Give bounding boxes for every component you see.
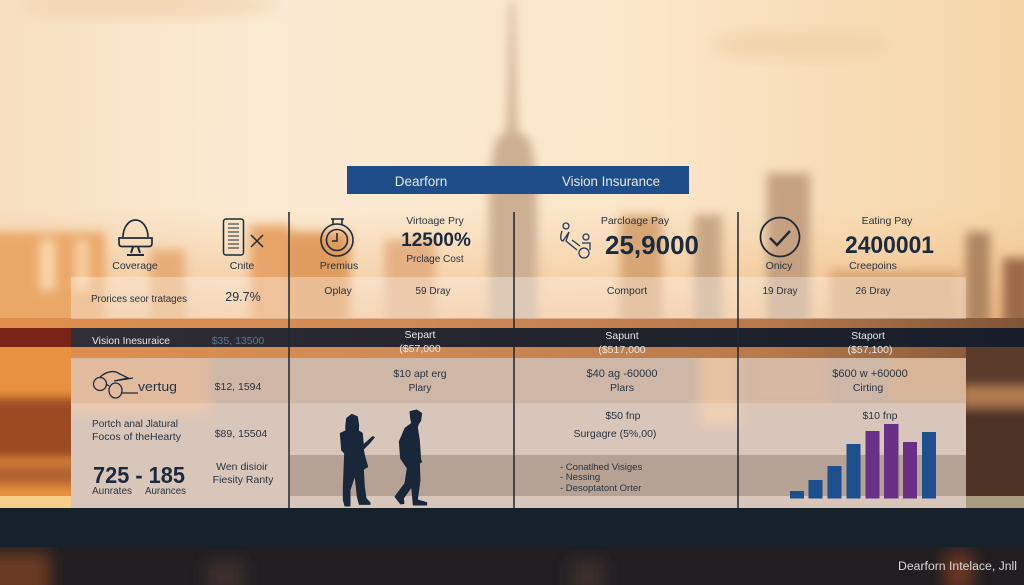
icon: stopwatch: [321, 219, 353, 256]
stat: 2400001: 2400001: [845, 232, 934, 259]
row 1 text: 59 Dray: [415, 286, 451, 297]
stat: 12500%: Prclage Cost: [406, 254, 464, 265]
panel: comparison table rows: [71, 277, 966, 508]
row 1 text: Prorices seor tratages: [91, 294, 187, 305]
right side blur strip: [966, 347, 1024, 496]
stat: 2400001: Eating Pay: [862, 215, 913, 227]
row 4 text: Focos of theHearty: [92, 432, 181, 443]
icon: glasses and car logo: [94, 372, 138, 398]
row 4 text: $50 fnp: [605, 410, 641, 422]
stat: 25,9000: [561, 215, 699, 260]
row 2 text: dark band: Sapunt: [605, 330, 639, 342]
row 1 text: Oplay: [324, 285, 352, 297]
row 5 text: - Nessing: [560, 472, 600, 483]
stat: 2400001: Creepoins: [849, 260, 897, 272]
icon: people with wheelchair: [561, 223, 590, 258]
row 2 text: dark band: $35, 13500: [212, 335, 264, 347]
column: premium header: Premius: [320, 260, 358, 272]
row 2 text: dark band: [92, 329, 892, 356]
row 3 text: $40 ag -60000: [587, 368, 657, 380]
silhouettes: two people walking and talking: [340, 410, 427, 506]
row 3 text: $12, 1594: [215, 381, 262, 393]
icon: coverage dome: [119, 220, 152, 255]
row 5 text: Wen disioir: [216, 461, 268, 473]
column: coverage header: Coverage: [112, 260, 158, 272]
row 5 text: Aunrates: [92, 486, 132, 497]
row 4 text: [92, 410, 898, 443]
dark band row: [0, 328, 1024, 347]
row 1 text: 19 Dray: [762, 286, 798, 297]
row 2 text: dark band: Separt: [405, 329, 436, 341]
column: premium header: [320, 219, 358, 272]
row 3 text: $600 w +60000: [832, 368, 908, 380]
row 4 text: Portch anal Jlatural: [92, 419, 178, 430]
title banner: [347, 166, 689, 194]
row 2 text: dark band: Staport: [851, 330, 885, 342]
row 3 text: Plars: [610, 382, 634, 394]
row 5 text: - Desoptatont Orter: [560, 483, 641, 494]
row 5 text: Fiesity Ranty: [213, 474, 274, 486]
row 5 text: - Conatlhed Visiges: [560, 462, 642, 473]
title banner: Dearforn: [395, 174, 447, 189]
stat: 2400001: Onicy: [766, 260, 793, 272]
stat: 25,9000: 25,9000: [605, 230, 699, 260]
footer credit: Dearforn Intelace, Jnll: [898, 561, 1017, 573]
stat: 25,9000: Parcloage Pay: [601, 215, 670, 227]
row 4 text: $10 fnp: [862, 410, 898, 422]
left side blur strip: [0, 347, 71, 496]
row 1 text: [91, 285, 891, 305]
row 3 text: Cirting: [853, 382, 883, 394]
stat: 12500%: [401, 215, 471, 265]
row 2 text: dark band: ($517,000: [598, 344, 646, 356]
row 1 text: 26 Dray: [855, 286, 891, 297]
bar chart: [790, 424, 936, 498]
row 5 text: 725 - 185: [93, 462, 185, 488]
title banner: Vision Insurance: [562, 174, 660, 189]
bottom dark bar: [0, 508, 1024, 547]
stat: 2400001: [760, 215, 934, 272]
column: crite header: Cnite: [230, 260, 254, 272]
icon: check circle: [760, 218, 800, 256]
row 2 text: dark band: ($57,100): [848, 344, 892, 356]
icon: document with cross: [224, 219, 263, 255]
row 2 text: dark band: ($57,000: [399, 343, 441, 355]
row 4 text: $89, 15504: [215, 428, 267, 440]
table backdrop: [60, 347, 980, 508]
row 1 text: 29.7%: [225, 290, 261, 304]
row 5 text: Aurances: [145, 486, 186, 497]
column dividers: [289, 212, 738, 508]
stat: 12500%: Virtoage Pry: [406, 215, 465, 227]
row 3 text: [94, 368, 908, 398]
row 5 text: [92, 461, 642, 497]
row 3 text: Plary: [409, 383, 431, 394]
row 4 text: Surgagre (5%,00): [574, 428, 656, 440]
column: coverage header: [112, 220, 158, 272]
column: crite header: [224, 219, 263, 272]
row 2 text: dark band: Vision Inesuraice: [92, 335, 170, 347]
stat: 12500%: 12500%: [401, 230, 471, 251]
row 1 text: Comport: [607, 285, 647, 297]
row 3 text: vertug: [138, 379, 177, 394]
row 3 text: $10 apt erg: [393, 368, 447, 380]
